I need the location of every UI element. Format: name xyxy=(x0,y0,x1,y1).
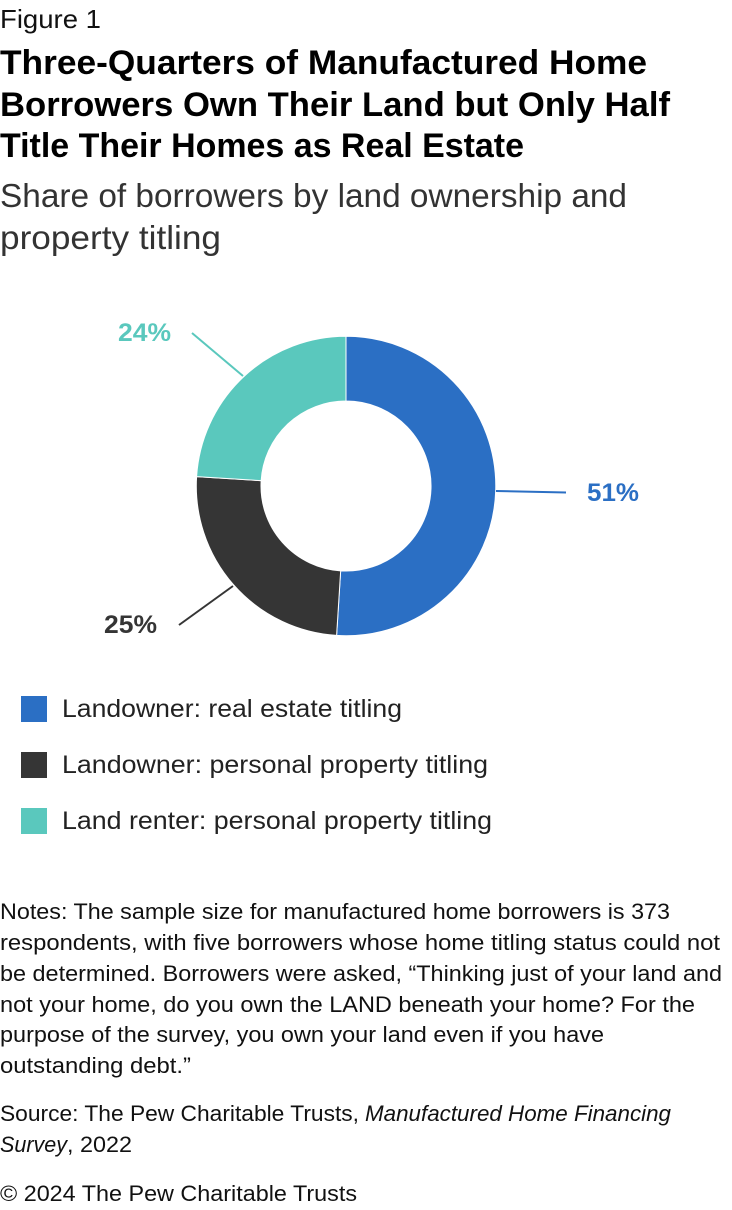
legend item: land renter: Land renter: personal property titling xyxy=(62,807,492,835)
source: Manufactured Home Financing xyxy=(365,1101,672,1126)
title: Borrowers Own Their Land but Only Half xyxy=(0,86,671,124)
figure label: Figure 1 xyxy=(0,4,101,34)
notes: respondents, with five borrowers whose home titling status could not xyxy=(0,930,720,955)
value label: 24%: 24% xyxy=(118,319,171,347)
subtitle: property titling xyxy=(0,219,221,256)
value label: 25%: 25% xyxy=(104,611,157,639)
source: Survey xyxy=(0,1132,69,1157)
segment: landowner real estate 51% xyxy=(337,336,496,636)
leader line: 24% xyxy=(192,333,243,376)
legend item: landowner real estate: Landowner: real estate titling xyxy=(62,695,402,723)
notes: outstanding debt.” xyxy=(0,1053,191,1078)
notes: not your home, do you own the LAND beneath your home? For the xyxy=(0,992,695,1017)
notes: Notes: The sample size for manufactured home borrowers is 373 xyxy=(0,899,670,924)
title: Title Their Homes as Real Estate xyxy=(0,127,524,165)
notes: purpose of the survey, you own your land even if you have xyxy=(0,1022,604,1047)
legend xyxy=(21,695,492,835)
title: Three-Quarters of Manufactured Home xyxy=(0,44,647,82)
notes xyxy=(0,899,722,1078)
notes: be determined. Borrowers were asked, “Thinking just of your land and xyxy=(0,961,722,986)
subtitle: Share of borrowers by land ownership and xyxy=(0,177,627,214)
leader line: 51% xyxy=(496,491,566,492)
leader line: 25% xyxy=(179,586,233,625)
copyright: © 2024 The Pew Charitable Trusts xyxy=(0,1181,357,1206)
title xyxy=(0,44,671,165)
segment: land renter 24% xyxy=(197,336,346,481)
legend item: landowner personal property: Landowner: personal property titling xyxy=(62,751,488,779)
source: , 2022 xyxy=(67,1132,132,1157)
subtitle xyxy=(0,177,627,256)
segment: landowner personal property 25% xyxy=(196,477,341,635)
value label: 51%: 51% xyxy=(587,479,639,507)
source: Source: The Pew Charitable Trusts, xyxy=(0,1101,359,1126)
donut chart xyxy=(104,319,639,639)
source xyxy=(0,1101,672,1157)
